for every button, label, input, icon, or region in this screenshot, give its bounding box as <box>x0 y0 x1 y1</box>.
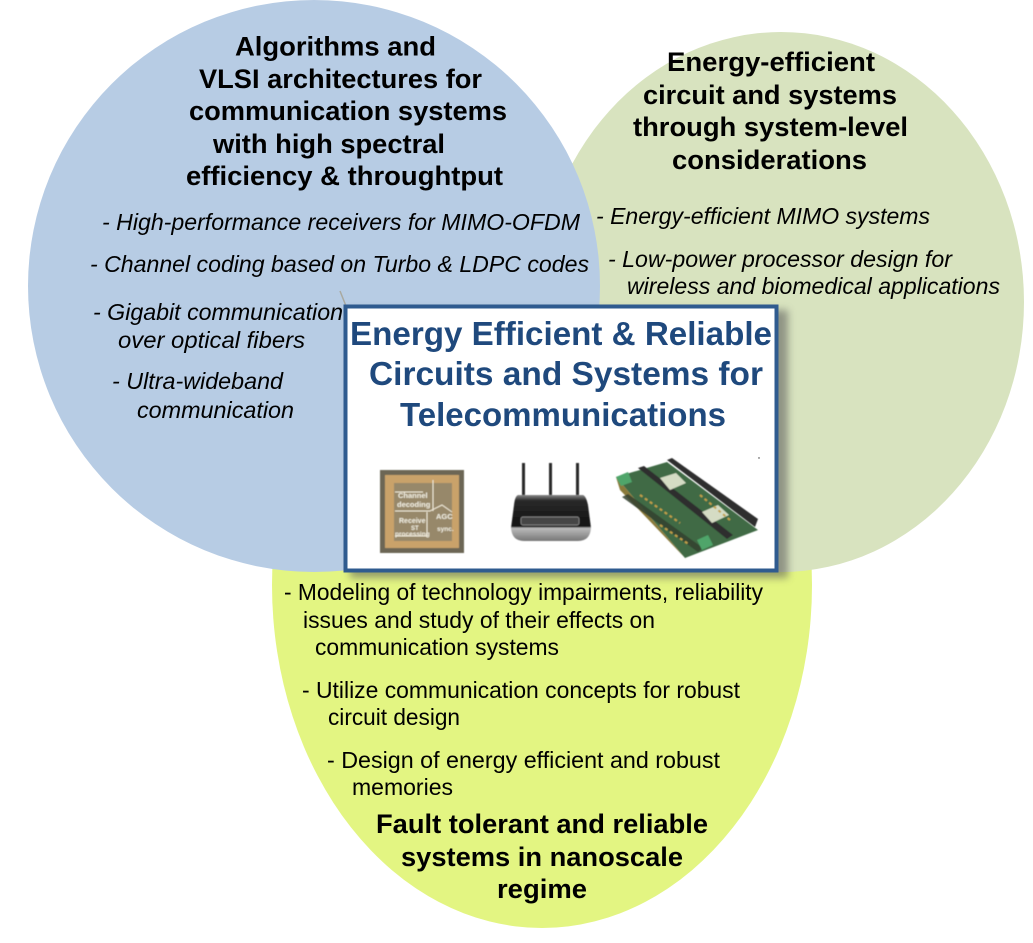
icon: chip die: Channel <box>398 491 428 500</box>
icon: chip die: processing <box>395 531 430 538</box>
icon: chip die: ST <box>411 526 419 532</box>
list: reliability topics <box>284 579 764 800</box>
heading: algorithms: efficiency & throughtput <box>186 161 503 191</box>
panel: algorithms circle <box>28 0 600 572</box>
icon: chip die: Receive <box>399 518 426 525</box>
center panel <box>346 306 776 570</box>
list: reliability topics: memories <box>352 774 453 800</box>
heading: algorithms: Algorithms and <box>235 32 436 62</box>
icon: wireless router <box>511 463 591 541</box>
heading: energy-efficient: considerations <box>672 145 867 175</box>
heading: fault tolerant: systems in nanoscale <box>401 842 683 872</box>
panel: energy-efficient circle <box>538 32 1024 572</box>
heading: energy-efficient: through system-level <box>633 112 908 142</box>
list: reliability topics: - Design of energy efficient and robust <box>327 747 721 773</box>
pointer tick <box>340 291 346 306</box>
heading: fault tolerant: Fault tolerant and reliable <box>376 809 708 839</box>
center title: Telecommunications <box>400 396 726 433</box>
center title: Circuits and Systems for <box>369 355 763 392</box>
speck <box>758 457 760 459</box>
list: reliability topics: - Utilize communication concepts for robust <box>302 677 741 703</box>
list: algorithms topics: - Gigabit communication <box>93 299 343 325</box>
list: energy-efficient topics: wireless and biomedical applications <box>627 273 1000 299</box>
heading: algorithms: with high spectral <box>212 129 445 159</box>
icon: chip die: decoding <box>397 500 431 509</box>
list: energy-efficient topics <box>596 203 1000 299</box>
heading: energy-efficient: Energy-efficient <box>667 47 875 77</box>
list: reliability topics: circuit design <box>328 704 460 730</box>
list: algorithms topics: - High-performance receivers for MIMO-OFDM <box>102 209 581 235</box>
center title: Energy Efficient & Reliable <box>350 315 772 352</box>
heading: fault tolerant <box>376 809 708 904</box>
list: reliability topics: communication systems <box>315 634 559 660</box>
heading: energy-efficient <box>633 47 908 175</box>
list: algorithms topics: - Channel coding based on Turbo & LDPC codes <box>90 251 589 277</box>
panel: fault tolerant circle <box>272 242 812 928</box>
center panel shadow <box>350 310 788 578</box>
list: reliability topics: issues and study of their effects on <box>303 607 655 633</box>
icon: chip die: sync. <box>437 526 454 533</box>
list: energy-efficient topics: - Low-power processor design for <box>608 246 953 272</box>
list: reliability topics: - Modeling of technology impairments, reliability <box>284 579 764 605</box>
heading: algorithms: VLSI architectures for <box>199 64 482 94</box>
list: algorithms topics <box>90 209 589 423</box>
center title <box>350 315 772 433</box>
heading: fault tolerant: regime <box>497 874 587 904</box>
icon: circuit board <box>616 458 758 560</box>
list: algorithms topics: - Ultra-wideband <box>112 368 284 394</box>
list: energy-efficient topics: - Energy-efficient MIMO systems <box>596 203 930 229</box>
icon: chip die: AGC <box>436 512 453 521</box>
list: algorithms topics: communication <box>137 397 294 423</box>
heading: algorithms <box>186 32 507 191</box>
heading: energy-efficient: circuit and systems <box>643 80 897 110</box>
list: algorithms topics: over optical fibers <box>118 327 306 353</box>
icon: chip die <box>380 470 464 553</box>
heading: algorithms: communication systems <box>189 96 507 126</box>
